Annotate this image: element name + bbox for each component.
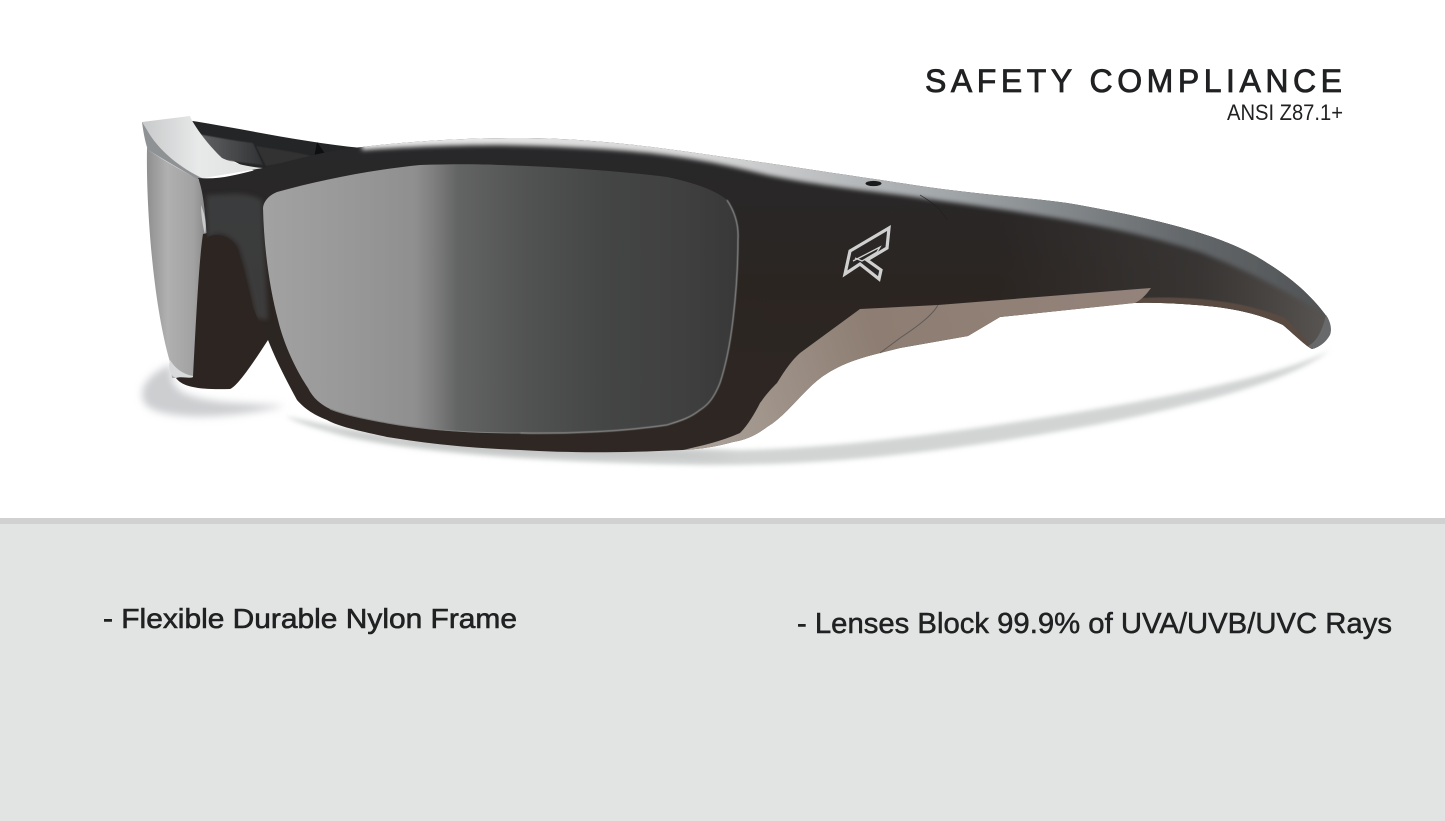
upper rim highlight — [358, 138, 1326, 316]
frame body and temple — [198, 138, 1331, 452]
brow highlight — [142, 116, 263, 179]
heading: safety compliance: SAFETY COMPLIANCE — [925, 63, 1342, 99]
highlight beside bridge — [201, 205, 206, 234]
feature text: frame: - Flexible Durable Nylon Frame — [103, 603, 517, 634]
left lens, side view — [147, 148, 210, 378]
hinge seam — [920, 195, 947, 220]
temple tip lower brown edge — [1136, 297, 1309, 346]
feature text: lenses: - Lenses Block 99.9% of UVA/UVB/UVC Rays — [797, 608, 1392, 640]
main lens — [263, 164, 738, 433]
screw hole — [866, 181, 882, 186]
nose pad — [176, 231, 282, 389]
lens right rim highlight — [520, 200, 738, 433]
tan underside of temple — [683, 288, 1151, 450]
far temple arm behind the frame — [186, 120, 362, 172]
clipped frame shading — [206, 138, 1326, 349]
sunglasses product illustration — [142, 90, 1360, 452]
panel: lower grey band — [0, 518, 1445, 821]
bridge shading — [206, 194, 268, 320]
sunglasses ground shadow — [142, 350, 1330, 465]
temple tip end facet — [1308, 315, 1331, 349]
tan section seam — [880, 305, 938, 353]
lens lower rim highlight — [330, 409, 520, 433]
icon: brand logo — [845, 228, 889, 279]
subheading: standard: ANSI Z87.1+ — [1227, 100, 1343, 125]
left lens lower trim — [169, 360, 194, 378]
temple arm shading — [1088, 206, 1326, 349]
